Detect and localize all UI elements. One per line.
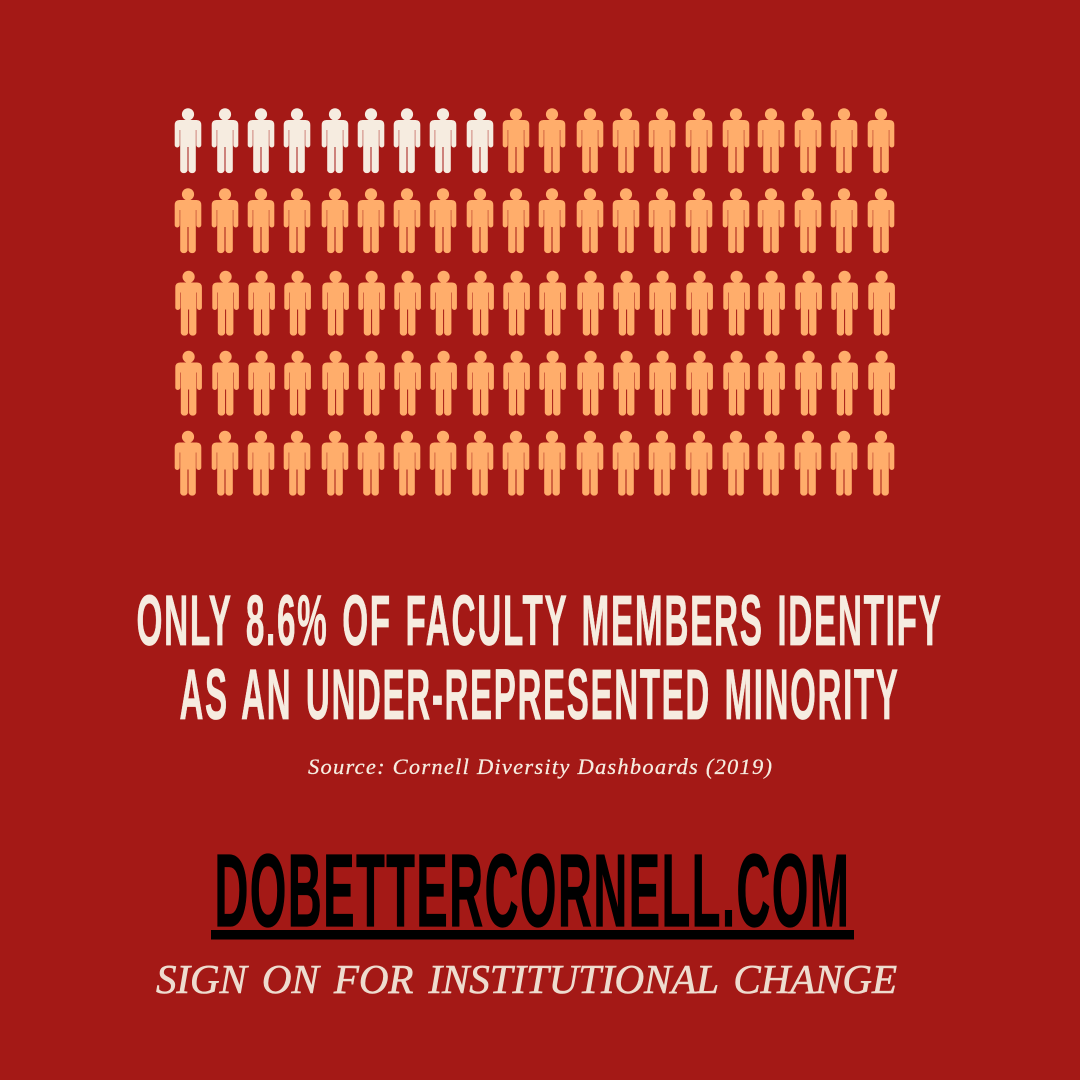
source note: Source: Cornell Diversity Dashboards (2019) (308, 754, 772, 779)
row 2 people (175, 188, 894, 253)
underline bar (211, 930, 854, 940)
call to action: SIGN ON FOR INSTITUTIONAL CHANGE (156, 956, 897, 1002)
highlighted under-represented minority figures (175, 108, 493, 173)
pictogram: 100 faculty members (175, 108, 895, 496)
headline (136, 582, 942, 735)
website link with underline (211, 833, 854, 948)
row 4 people (175, 351, 895, 416)
row 1 people (175, 108, 894, 173)
row 5 people (175, 431, 894, 496)
remaining figures in row 1 (503, 108, 894, 173)
row 3 people (175, 271, 895, 336)
